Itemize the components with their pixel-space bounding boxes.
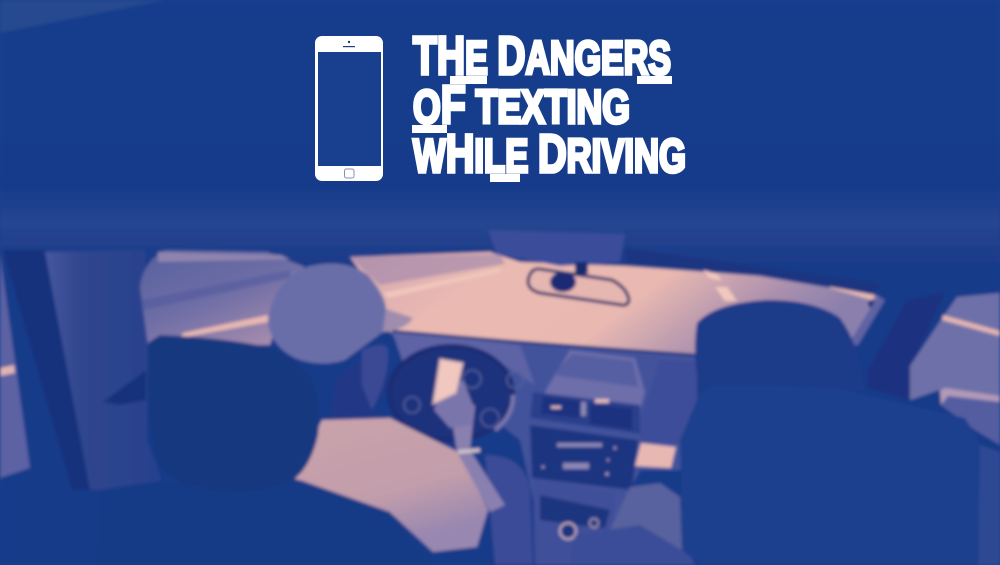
centre radio <box>530 425 638 490</box>
centre console tray <box>533 478 616 565</box>
instrument binnacle display hood <box>545 350 645 410</box>
headrest shadow <box>103 370 146 405</box>
dashboard <box>390 332 700 530</box>
driver baseball cap <box>268 263 413 364</box>
phone icon <box>315 36 383 181</box>
far left rear window <box>0 254 30 478</box>
lower right door area <box>978 445 1000 565</box>
visor and mirror housing <box>488 230 625 266</box>
driver shirt <box>293 418 488 552</box>
driver neck <box>330 340 392 430</box>
steering wheel <box>389 346 523 440</box>
windshield right pillar <box>848 296 885 345</box>
phone screen <box>318 52 381 166</box>
title: THE DANGERS <box>413 26 671 86</box>
watch <box>458 448 480 454</box>
driver ear and face <box>362 345 388 410</box>
left door pillar <box>3 250 90 490</box>
instrument dials <box>404 370 523 427</box>
left trim panel <box>45 250 165 490</box>
speaker and camera <box>343 41 355 47</box>
title: OF TEXTING <box>413 75 630 135</box>
home button <box>344 169 354 178</box>
driver seat headrest <box>148 335 319 492</box>
windshield with road view <box>350 252 878 355</box>
windshield base line <box>392 331 695 355</box>
title: WHILE DRIVING <box>413 124 686 184</box>
driver forearm <box>450 405 505 512</box>
ceiling of the car <box>0 0 1000 262</box>
driver knee <box>485 455 533 565</box>
roof edge above windshield <box>625 248 880 295</box>
passenger seat <box>680 384 980 565</box>
paper on passenger side <box>635 443 676 468</box>
driver seat back <box>95 480 430 565</box>
title <box>412 26 686 184</box>
hood over instruments <box>392 331 535 385</box>
hand holding phone <box>433 359 473 428</box>
right of dash panel <box>640 360 700 445</box>
rear-view mirror <box>528 262 629 305</box>
title flourishes <box>412 76 672 182</box>
passenger head <box>695 300 864 392</box>
right side window <box>910 293 1000 445</box>
passenger knee <box>610 483 682 552</box>
phone body <box>315 36 383 181</box>
centre vents <box>530 392 640 434</box>
right door pillar <box>867 292 945 400</box>
left side window with road <box>140 250 305 345</box>
passenger lap <box>570 525 695 565</box>
top left roof highlight <box>0 0 165 33</box>
